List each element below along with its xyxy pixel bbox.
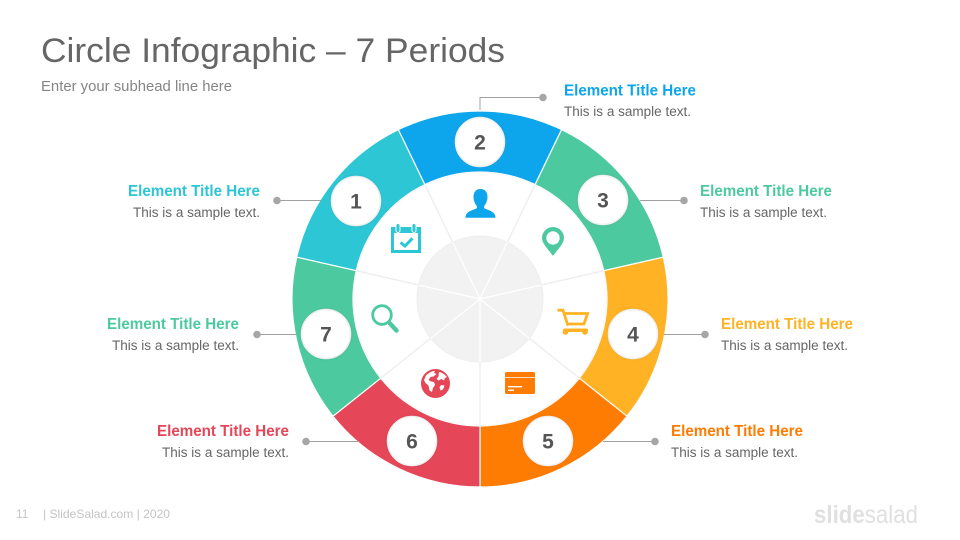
badge 6: 6 [406, 430, 418, 454]
badge 5 [524, 416, 572, 466]
badge 2: 2 [474, 132, 486, 154]
footer text: | SlideSalad.com | 2020 [43, 507, 170, 521]
badge 1: 1 [350, 190, 362, 214]
badge 3: 3 [597, 190, 609, 212]
circle diagram [292, 111, 668, 487]
segment 4 [579, 257, 668, 416]
badge 3 [578, 176, 628, 224]
badge 4 [608, 310, 658, 358]
callout 3: This is a sample text. [700, 205, 827, 220]
icon: calendar [391, 224, 421, 252]
icon: person [466, 189, 496, 218]
callout 6 [157, 423, 358, 460]
callout 7: This is a sample text. [112, 338, 239, 353]
callout 7: Element Title Here [107, 316, 239, 333]
footer text: 11 [16, 507, 29, 521]
icon: globe [421, 369, 450, 398]
callout 3: Element Title Here [700, 183, 832, 200]
callout 2: This is a sample text. [564, 104, 691, 119]
icon: credit card [505, 372, 535, 394]
callout 3 [640, 183, 832, 220]
callout 4 [664, 316, 853, 353]
icon: magnifier [373, 306, 396, 330]
callout 5: This is a sample text. [671, 445, 798, 460]
callout 1: Element Title Here [128, 183, 260, 200]
callout 1: This is a sample text. [133, 205, 260, 220]
badge 2 [456, 118, 504, 166]
segment 7 [292, 257, 381, 416]
segment 5 [480, 378, 627, 487]
callout 4: This is a sample text. [721, 338, 848, 353]
segment 6 [333, 378, 480, 487]
callout 5 [603, 423, 803, 460]
logo wordmark: slidesalad [814, 501, 918, 529]
callout 2 [480, 82, 696, 119]
callout 7 [107, 316, 296, 353]
callout 1 [128, 183, 321, 220]
badge 7 [302, 310, 350, 358]
callout 6: This is a sample text. [162, 445, 289, 460]
badge 5: 5 [542, 430, 554, 454]
subhead: Enter your subhead line here [41, 79, 232, 95]
icon: location pin [542, 227, 564, 256]
callout 5: Element Title Here [671, 423, 803, 440]
inner white disc [354, 173, 606, 425]
center hub [417, 236, 543, 362]
icon: shopping cart [558, 310, 588, 335]
segment 2 [398, 111, 562, 185]
segment 3 [535, 130, 663, 271]
callout 4: Element Title Here [721, 316, 853, 333]
callout 2: Element Title Here [564, 82, 696, 100]
callout 6: Element Title Here [157, 423, 289, 440]
badge 1 [332, 176, 380, 226]
segment 1 [297, 130, 425, 271]
badge 6 [388, 416, 436, 466]
inner spokes [356, 185, 604, 426]
title: Circle Infographic – 7 Periods [41, 32, 505, 70]
badge 4: 4 [627, 324, 639, 346]
badge 7: 7 [320, 324, 332, 346]
